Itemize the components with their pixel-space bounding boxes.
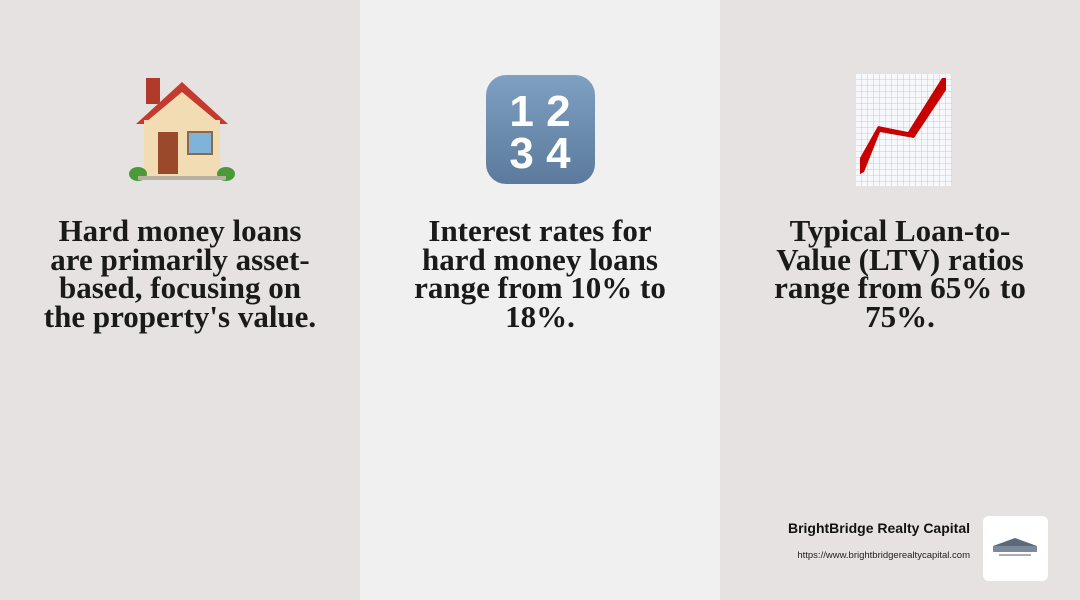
panel: LTV [720,0,1080,600]
text: interest rates: Interest rates for hard money loans range from 10% to 18%. [414,213,666,334]
icon: house [129,78,235,181]
text: LTV: Typical Loan-to-Value (LTV) ratios range from 65% to 75%. [774,213,1026,334]
logo [983,516,1048,581]
icon: 1234: 1 2 [509,87,571,136]
brand block [788,516,1048,581]
icon: 1234: 3 4 [509,129,571,178]
icon: 1234 [486,75,595,184]
panel: interest rates [360,0,720,600]
url: https://www.brightbridgerealtycapital.com [797,550,970,561]
text: asset-based: Hard money loans are primarily asset-based, focusing on the property's value. [44,213,316,334]
brand name: BrightBridge Realty Capital [788,520,970,536]
panel: asset-based [0,0,360,600]
icon: chart [856,74,952,186]
